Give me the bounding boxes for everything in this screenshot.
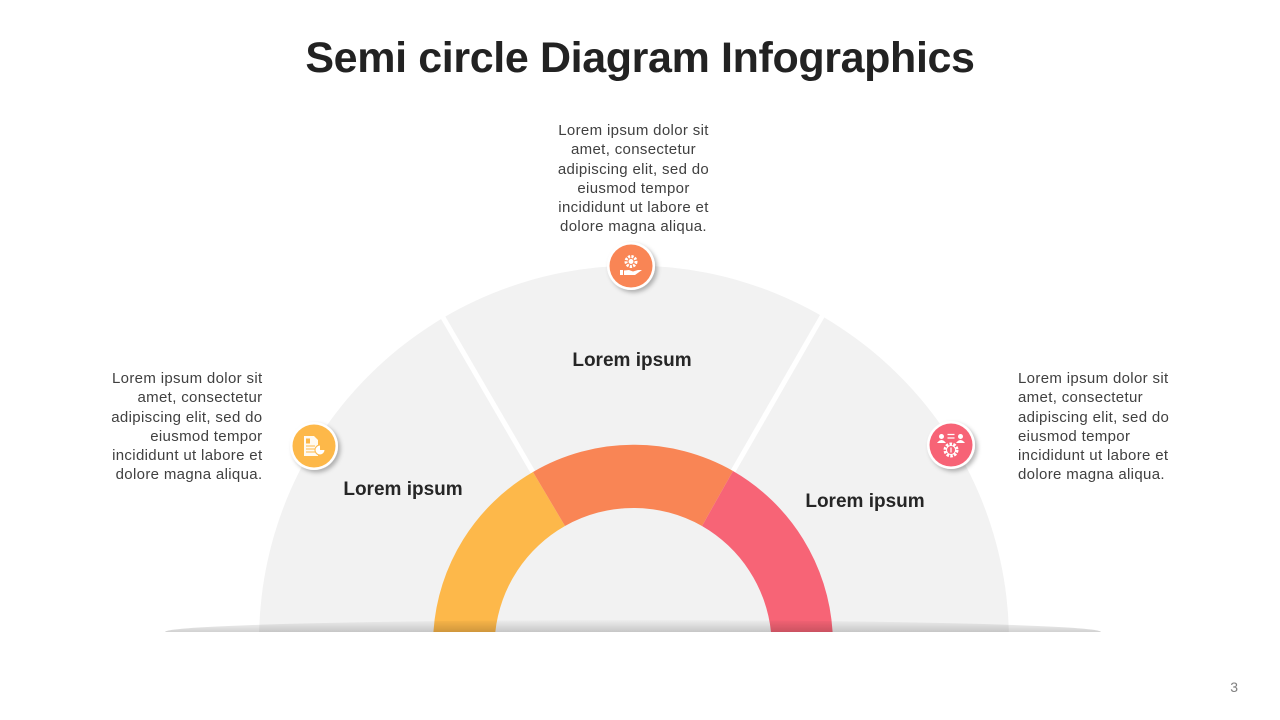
ring segments	[433, 445, 833, 632]
panel: outer grey semicircle	[259, 266, 1009, 632]
text block: right	[1018, 370, 1169, 483]
text block: top: Lorem ipsum dolor sit	[558, 122, 709, 139]
divider: right	[732, 313, 824, 473]
label: right segment: Lorem ipsum	[805, 491, 925, 512]
icon: document with pie chart	[290, 422, 338, 470]
base shadow	[165, 620, 1101, 632]
text block: right: eiusmod tempor	[1018, 428, 1130, 445]
text block: right: adipiscing elit, sed do	[1018, 409, 1169, 426]
label: top segment: Lorem ipsum	[572, 350, 692, 371]
text block: left	[111, 370, 262, 483]
text block: left: dolore magna aliqua.	[116, 466, 262, 483]
text block: left: Lorem ipsum dolor sit	[112, 370, 262, 387]
text block: right: Lorem ipsum dolor sit	[1018, 370, 1169, 387]
text block: right: amet, consectetur	[1018, 389, 1143, 406]
page number: 3	[1230, 679, 1238, 695]
text block: top: dolore magna aliqua.	[560, 218, 707, 235]
text block: left: amet, consectetur	[137, 389, 262, 406]
label: left segment: Lorem ipsum	[343, 479, 463, 500]
text block: top: adipiscing elit, sed do	[558, 161, 709, 178]
ring segment: red	[702, 471, 833, 632]
text block: top	[558, 122, 709, 235]
text block: left: adipiscing elit, sed do	[111, 409, 262, 426]
text block: top: incididunt ut labore et	[558, 199, 709, 216]
ring segment: yellow	[433, 472, 565, 632]
title: Semi circle Diagram Infographics	[305, 34, 975, 82]
divider: left	[441, 314, 534, 474]
text block: left: eiusmod tempor	[150, 428, 262, 445]
text block: top: eiusmod tempor	[577, 180, 690, 197]
icon: people exchanging money gear	[927, 421, 975, 469]
text block: right: incididunt ut labore et	[1018, 447, 1168, 464]
icon: hand holding gear	[607, 242, 655, 290]
text block: top: amet, consectetur	[571, 141, 696, 158]
text block: right: dolore magna aliqua.	[1018, 466, 1165, 483]
text block: left: incididunt ut labore et	[112, 447, 262, 464]
ring segment: orange	[533, 445, 733, 526]
